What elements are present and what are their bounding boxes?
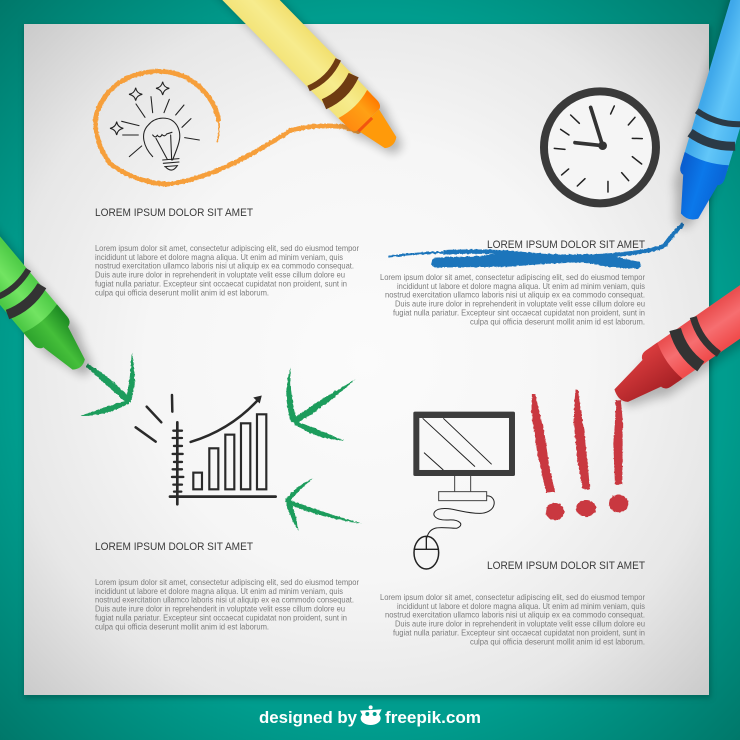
panel: light bulb idea [95,71,359,297]
yellow crayon [132,0,413,165]
heading: LOREM IPSUM DOLOR SIT AMET [95,207,253,219]
panel: clock [380,91,683,326]
body text: incididunt ut labore et dolore magna aliqua. Ut enim ad minim veniam, quis [397,281,645,291]
body text [95,243,359,297]
icon: clock [544,91,656,203]
green crayon [0,79,104,386]
body text: Lorem ipsum dolor sit amet, consectetur adipiscing elit, sed do eiusmod tempor [380,272,645,282]
body text: culpa qui officia deserunt mollit anim id est laborum. [95,621,269,631]
body text: nostrud exercitation ullamco laboris nisi ut aliquip ex ea commodo consequat. [385,610,645,620]
body text: Lorem ipsum dolor sit amet, consectetur adipiscing elit, sed do eiusmod tempor [95,243,359,253]
heading: LOREM IPSUM DOLOR SIT AMET [487,239,645,251]
footer credit [259,705,481,727]
body text: nostrud exercitation ullamco laboris nisi ut aliquip ex ea commodo consequat. [385,290,645,300]
bar chart icon [136,395,276,504]
body text: nostrud exercitation ullamco laboris nisi ut aliquip ex ea commodo consequat. [95,261,354,271]
orange crayon line [96,71,358,184]
panel: computer [380,389,645,646]
body text: nostrud exercitation ullamco laboris nisi ut aliquip ex ea commodo consequat. [95,595,354,605]
body text: fugiat nulla pariatur. Excepteur sint occaecat cupidatat non proident, sunt in [393,628,645,638]
red crayon exclamation marks [532,389,628,520]
heading: LOREM IPSUM DOLOR SIT AMET [95,541,253,553]
blue crayon scribble [388,224,683,269]
body text: fugiat nulla pariatur. Excepteur sint occaecat cupidatat non proident, sunt in [95,278,347,288]
body text: incididunt ut labore et dolore magna aliqua. Ut enim ad minim veniam, quis [397,601,645,611]
body text: fugiat nulla pariatur. Excepteur sint occaecat cupidatat non proident, sunt in [95,612,347,622]
credit text left: designed by [259,708,358,727]
blue crayon [663,0,740,233]
body text: fugiat nulla pariatur. Excepteur sint occaecat cupidatat non proident, sunt in [393,308,645,318]
body text: Duis aute irure dolor in reprehenderit in voluptate velit esse cillum dolore eu [395,619,645,629]
heading: LOREM IPSUM DOLOR SIT AMET [487,560,645,572]
credit text right: freepik.com [385,708,481,727]
body text: culpa qui officia deserunt mollit anim id est laborum. [95,287,269,297]
panel: bar chart [80,353,362,631]
icon: light bulb with sparkles [110,82,199,170]
body text: Duis aute irure dolor in reprehenderit in voluptate velit esse cillum dolore eu [395,299,645,309]
body text [380,592,645,646]
body text: Duis aute irure dolor in reprehenderit in voluptate velit esse cillum dolore eu [95,604,345,614]
icon: monitor and mouse [413,412,515,569]
body text: Lorem ipsum dolor sit amet, consectetur adipiscing elit, sed do eiusmod tempor [95,577,359,587]
body text: Duis aute irure dolor in reprehenderit in voluptate velit esse cillum dolore eu [95,270,345,280]
red crayon [605,174,740,419]
body text: incididunt ut labore et dolore magna aliqua. Ut enim ad minim veniam, quis [95,252,343,262]
body text: Lorem ipsum dolor sit amet, consectetur adipiscing elit, sed do eiusmod tempor [380,592,645,602]
body text: incididunt ut labore et dolore magna aliqua. Ut enim ad minim veniam, quis [95,586,343,596]
body text [380,272,645,326]
body text: culpa qui officia deserunt mollit anim id est laborum. [470,636,645,646]
body text [95,577,359,631]
icon: freepik mascot [360,705,382,725]
body text: culpa qui officia deserunt mollit anim id est laborum. [470,316,645,326]
green crayon arrows [80,353,362,532]
